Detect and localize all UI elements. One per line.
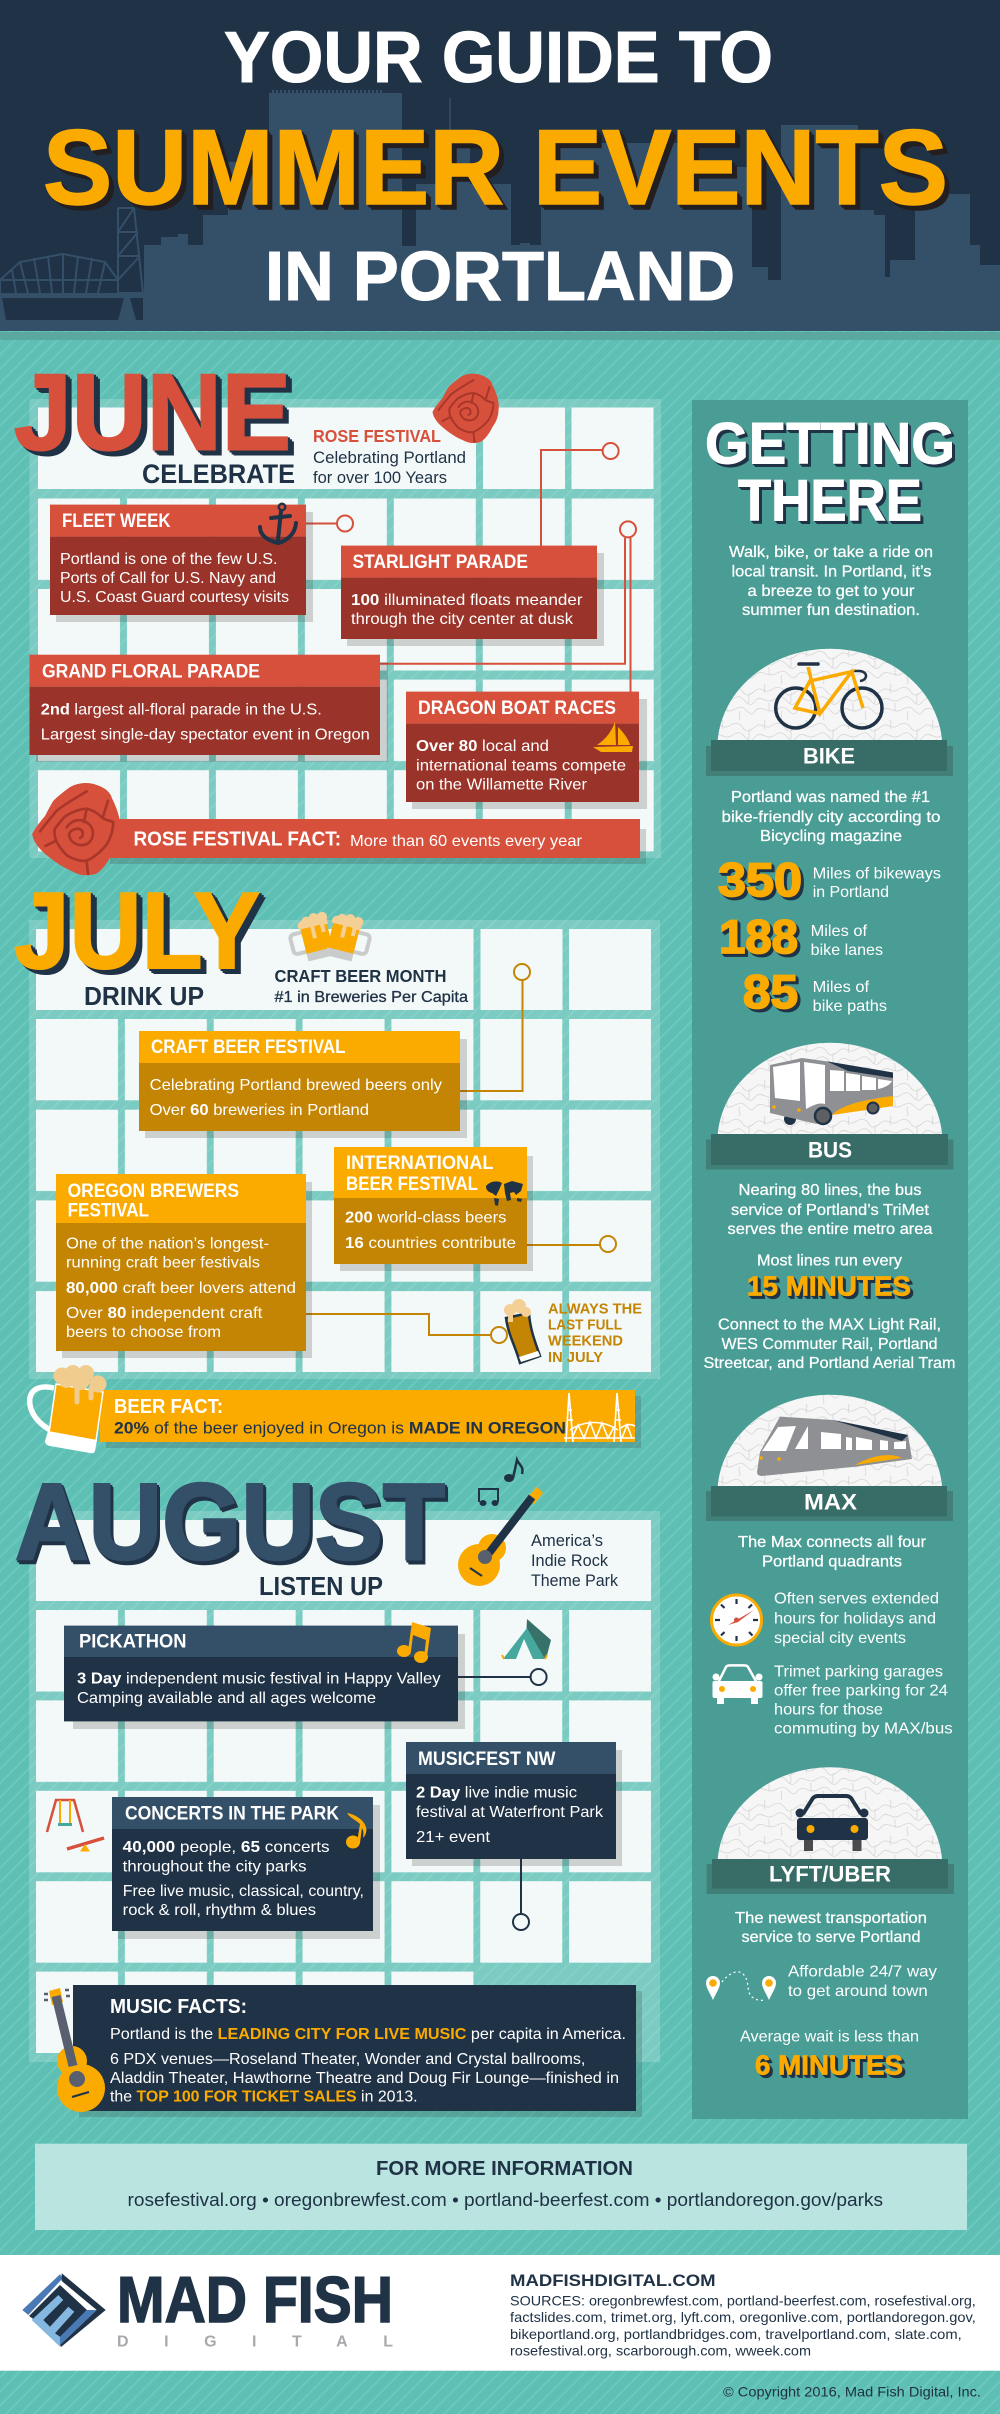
section: Bike [706, 649, 953, 1018]
connector lines [458, 1669, 547, 1930]
card: Dragon Boat Races: Over 80 local and [416, 738, 549, 755]
sidebar heading [705, 412, 955, 534]
Bus description [728, 1182, 933, 1238]
card: Craft Beer Festival: Over 60 breweries in Portland [150, 1102, 369, 1119]
connector lines [306, 443, 636, 692]
sidebar heading: GETTING [705, 412, 955, 476]
panel: for more information: FOR MORE INFORMATION [376, 2158, 633, 2180]
card: Pickathon: 3 Day independent music festival in Happy Valley [77, 1671, 441, 1688]
sidebar intro: local transit. In Portland, it’s [732, 564, 932, 580]
stat: 350 miles: in Portland [813, 884, 889, 901]
label: Max [706, 1486, 953, 1521]
sources block: MADFISHDIGITAL.COM [510, 2271, 716, 2290]
Max parking text: Trimet parking garages [774, 1663, 943, 1680]
card: Musicfest NW: 2 Day live indie music [416, 1785, 577, 1802]
icon: bus on dome [718, 1043, 942, 1134]
note: always the last full weekend [548, 1301, 642, 1366]
panel: June calendar [14, 352, 661, 875]
card: Craft Beer Festival: CRAFT BEER FESTIVAL [151, 1037, 346, 1058]
card: Oregon Brewers Festival [56, 1174, 312, 1358]
month title: July: JULY [14, 870, 260, 992]
stat: 15 minutes: 15 MINUTES [747, 1271, 911, 1302]
card: Dragon Boat Races: DRAGON BOAT RACES [418, 698, 616, 719]
Bus connections [704, 1317, 956, 1372]
card: Craft Beer Festival [139, 1031, 467, 1138]
Bus connections: Streetcar, and Portland Aerial Tram [704, 1355, 956, 1372]
Lyft/Uber description: service to serve Portland [742, 1929, 920, 1946]
card: Fleet Week: U.S. Coast Guard courtesy visits [60, 589, 289, 606]
icon: music note [346, 1813, 366, 1848]
card: Grand Floral Parade: 2nd largest all-floral parade in the U.S. [41, 701, 322, 718]
Rose Festival intro [313, 426, 466, 487]
stat: 6 minutes [740, 2028, 919, 2080]
card: Craft Beer Festival: Celebrating Portland brewed beers only [150, 1077, 442, 1094]
card: Musicfest NW: festival at Waterfront Park [416, 1804, 604, 1821]
Lyft/Uber affordable text: to get around town [788, 1983, 928, 2000]
Rose Festival intro: ROSE FESTIVAL [313, 426, 441, 446]
card: Dragon Boat Races: international teams compete [416, 758, 626, 774]
stat: 15 minutes: Most lines run every [757, 1253, 902, 1270]
card: Starlight Parade: STARLIGHT PARADE [352, 552, 528, 573]
icon: diamond logo [22, 2273, 106, 2347]
panel: for more information [35, 2144, 967, 2230]
icon: anchor [260, 504, 296, 543]
connector lines [306, 964, 616, 1343]
sidebar intro [729, 544, 933, 619]
icon: swing and seesaw [47, 1800, 104, 1852]
note: always the last full weekend: WEEKEND [548, 1333, 623, 1350]
Craft Beer Month intro: #1 in Breweries Per Capita [274, 989, 468, 1006]
logo: Mad Fish Digital [22, 2263, 393, 2351]
label: Max: MAX [804, 1490, 857, 1514]
card: Pickathon: Camping available and all ages welcome [77, 1690, 376, 1707]
stat: 188 miles: 188 [719, 910, 798, 963]
stat: 350 miles: 350 [718, 853, 802, 906]
logo: Mad Fish Digital: MAD FISH [117, 2263, 393, 2336]
card: Concerts in the Park: throughout the city parks [123, 1858, 307, 1876]
callout: Rose Festival fact: More than 60 events every year [350, 833, 583, 850]
callout: Music facts: Portland is the LEADING CITY FOR LIVE MUSIC per capita in America. [110, 2026, 626, 2043]
note: always the last full weekend: LAST FULL [548, 1317, 622, 1334]
icon: music notes [397, 1622, 431, 1663]
Bike description [722, 789, 941, 845]
Max parking text [774, 1663, 953, 1738]
icon: dark car on dome [718, 1767, 942, 1859]
callout: Rose Festival fact [32, 783, 646, 875]
Max hours text: special city events [774, 1630, 906, 1647]
Bike description: Portland was named the #1 [731, 789, 930, 806]
icon: bicycle on dome [718, 649, 942, 740]
card: Starlight Parade: 100 illuminated floats meander [351, 592, 583, 609]
note: always the last full weekend: ALWAYS THE [548, 1301, 642, 1318]
card: Concerts in the Park [112, 1797, 380, 1939]
card: Oregon Brewers Festival: running craft beer festivals [66, 1254, 260, 1272]
icon: pint glass [504, 1299, 540, 1363]
sources block: factslides.com, trimet.org, lyft.com, oregonlive.com, portlandoregon.gov, [510, 2309, 976, 2325]
month title: June: JUNE [14, 352, 291, 474]
stat: 6 minutes: Average wait is less than [740, 2028, 919, 2046]
card: Pickathon [64, 1622, 465, 1729]
label: Lyft/Uber: LYFT/UBER [769, 1862, 891, 1887]
panel: August calendar [15, 1460, 660, 2117]
icon: MAX train on dome [718, 1395, 942, 1486]
sources block: SOURCES: oregonbrewfest.com, portland-beerfest.com, rosefestival.org, [510, 2292, 976, 2308]
icon: guitar [44, 1988, 105, 2112]
sidebar intro: a breeze to get to your [748, 583, 915, 600]
callout: Music facts [44, 1985, 642, 2117]
card: Pickathon: PICKATHON [79, 1632, 186, 1653]
card: Starlight Parade: through the city center at dusk [351, 611, 574, 628]
icon: white car [712, 1665, 762, 1704]
icon: sailboat [593, 722, 633, 752]
Bus connections: Connect to the MAX Light Rail, [718, 1317, 941, 1334]
month title: August: AUGUST [15, 1461, 445, 1583]
callout: Rose Festival fact: ROSE FESTIVAL FACT: [134, 828, 341, 850]
card: Concerts in the Park: Free live music, classical, country, [123, 1883, 364, 1900]
card: Fleet Week [50, 504, 313, 622]
card: Musicfest NW [406, 1742, 622, 1866]
stat: 6 minutes: 6 MINUTES [755, 2050, 903, 2080]
panel: for more information: rosefestival.org • oregonbrewfest.com • portland-beerfest.com • portlandoregon.gov/parks [128, 2190, 883, 2210]
Craft Beer Month intro: CRAFT BEER MONTH [274, 966, 446, 986]
label: Bike [706, 740, 953, 776]
card: Dragon Boat Races: on the Willamette River [416, 776, 588, 793]
sources block: bikeportland.org, portlandbridges.com, travelportland.com, slate.com, [510, 2326, 962, 2342]
sources block [510, 2271, 976, 2359]
label: Bus: BUS [808, 1138, 852, 1163]
stat: 85 miles: bike paths [813, 998, 887, 1015]
Craft Beer Month intro [274, 966, 468, 1006]
title line 1: YOUR GUIDE TO [224, 18, 773, 98]
stat: 85 miles [743, 965, 887, 1018]
Indie rock theme park note: Theme Park [531, 1572, 619, 1590]
card: Oregon Brewers Festival: 80,000 craft beer lovers attend [66, 1280, 296, 1297]
Bike description: Bicycling magazine [760, 828, 902, 845]
Rose Festival intro: Celebrating Portland [313, 449, 466, 467]
Lyft/Uber description: The newest transportation [735, 1910, 927, 1927]
Lyft/Uber affordable text [788, 1963, 937, 2000]
callout: Beer fact [30, 1365, 641, 1453]
label: Bike: BIKE [803, 744, 855, 768]
Max hours text: Often serves extended [774, 1590, 939, 1607]
card: International Beer Festival: 16 countries contribute [345, 1235, 516, 1252]
card: Oregon Brewers Festival: One of the nation’s longest- [66, 1236, 269, 1253]
card: International Beer Festival: 200 world-class beers [345, 1210, 506, 1226]
card: Oregon Brewers Festival: OREGON BREWERS [68, 1181, 239, 1202]
Max description: Portland quadrants [762, 1554, 902, 1570]
sidebar intro: Walk, bike, or take a ride on [729, 544, 933, 561]
label: Lyft/Uber [707, 1859, 954, 1894]
card: Concerts in the Park: CONCERTS IN THE PARK [125, 1803, 339, 1824]
stat: 85 miles: Miles of [813, 979, 870, 996]
callout: Music facts: 6 PDX venues—Roseland Theater, Wonder and Crystal ballrooms, [110, 2051, 585, 2068]
stat: 85 miles: 85 [743, 965, 798, 1018]
stat: 188 miles [719, 910, 883, 963]
card: International Beer Festival: INTERNATIONAL [346, 1153, 494, 1174]
header shade strip [0, 332, 1000, 340]
icon: guitar and notes [458, 1460, 541, 1586]
callout: Music facts: the TOP 100 FOR TICKET SALES in 2013. [110, 2089, 418, 2106]
subtitle: Drink Up: DRINK UP [84, 981, 204, 1011]
title line 2: SUMMER EVENTS [43, 107, 948, 227]
callout: Music facts: Aladdin Theater, Hawthorne Theatre and Doug Fir Lounge—finished in [110, 2070, 619, 2087]
Bus description: serves the entire metro area [728, 1221, 933, 1238]
Max hours text: hours for holidays and [774, 1610, 936, 1627]
panel: Getting There sidebar [692, 400, 968, 2119]
Max hours text [774, 1590, 939, 1647]
note: always the last full weekend: IN JULY [548, 1349, 603, 1366]
Max parking text: commuting by MAX/bus [774, 1721, 953, 1738]
card: International Beer Festival: BEER FESTIVAL [346, 1174, 478, 1195]
icon: tent [502, 1619, 551, 1659]
Lyft/Uber description [735, 1910, 927, 1946]
Max description: The Max connects all four [738, 1534, 927, 1551]
icon: clinking beer mugs [286, 910, 374, 964]
callout: Beer fact: 20% of the beer enjoyed in Oregon is MADE IN OREGON [114, 1420, 566, 1438]
card: Starlight Parade [341, 546, 604, 646]
icon: rose [432, 374, 499, 443]
stat: 15 minutes [747, 1253, 911, 1302]
icon: route pins [706, 1972, 776, 2000]
Bike description: bike-friendly city according to [722, 809, 941, 826]
card: Dragon Boat Races [406, 692, 647, 809]
stat: 188 miles: Miles of [811, 923, 868, 940]
Bus description: Nearing 80 lines, the bus [738, 1182, 922, 1199]
Indie rock theme park note: Indie Rock [531, 1552, 609, 1570]
card: Oregon Brewers Festival: FESTIVAL [68, 1200, 149, 1222]
copyright: © Copyright 2016, Mad Fish Digital, Inc. [723, 2384, 981, 2400]
card: Grand Floral Parade [30, 655, 388, 762]
section: Lyft/Uber [706, 1767, 954, 2080]
card: Grand Floral Parade: Largest single-day spectator event in Oregon [41, 726, 370, 744]
section: Bus [704, 1043, 956, 1372]
card: Musicfest NW: 21+ event [416, 1829, 491, 1846]
subtitle: Listen Up: LISTEN UP [259, 1571, 383, 1601]
Bus connections: WES Commuter Rail, Portland [722, 1336, 938, 1353]
stat: 188 miles: bike lanes [811, 942, 883, 959]
footer panel [0, 2255, 1000, 2371]
Portland skyline [0, 92, 1000, 331]
card: Grand Floral Parade: GRAND FLORAL PARADE [42, 662, 260, 682]
section: Max [706, 1395, 953, 1738]
sidebar intro: summer fun destination. [742, 602, 920, 619]
icon: large beer mug [30, 1365, 107, 1453]
sources block: rosefestival.org, scarborough.com, wweek.com [510, 2343, 811, 2359]
icon: large rose [32, 783, 120, 875]
card: Oregon Brewers Festival: Over 80 independent craft [66, 1305, 263, 1322]
label: Bus [706, 1134, 954, 1170]
card: Concerts in the Park: 40,000 people, 65 concerts [123, 1839, 330, 1856]
card: Concerts in the Park: rock & roll, rhythm & blues [123, 1902, 316, 1919]
subtitle: Celebrate: CELEBRATE [142, 459, 295, 489]
card: Fleet Week: Portland is one of the few U.S. [60, 551, 278, 568]
card: International Beer Festival [334, 1147, 533, 1271]
Lyft/Uber affordable text: Affordable 24/7 way [788, 1963, 937, 1980]
logo: Mad Fish Digital: DIGITAL [117, 2334, 393, 2351]
stat: 350 miles: Miles of bikeways [813, 866, 941, 883]
icon: bridge [564, 1393, 635, 1442]
icon: clock [712, 1595, 762, 1645]
Indie rock theme park note: America’s [531, 1532, 603, 1550]
card: Musicfest NW: MUSICFEST NW [418, 1749, 556, 1770]
card: Fleet Week: FLEET WEEK [62, 511, 171, 532]
panel: July calendar [14, 870, 660, 1453]
Rose Festival intro: for over 100 Years [313, 469, 447, 487]
sidebar heading: THERE [738, 469, 922, 534]
callout: Beer fact: BEER FACT: [114, 1396, 223, 1418]
Max description [738, 1534, 927, 1570]
Bus description: service of Portland’s TriMet [731, 1202, 930, 1219]
Max parking text: hours for those [774, 1702, 883, 1719]
callout: Music facts: MUSIC FACTS: [110, 1996, 247, 2018]
card: Oregon Brewers Festival: beers to choose from [66, 1324, 221, 1341]
title line 3: IN PORTLAND [265, 237, 735, 315]
header banner [0, 0, 1000, 331]
Max parking text: offer free parking for 24 [774, 1682, 948, 1699]
icon: world map [486, 1181, 523, 1206]
stat: 350 miles [718, 853, 941, 906]
card: Fleet Week: Ports of Call for U.S. Navy and [60, 570, 276, 587]
Indie rock theme park note [531, 1532, 619, 1590]
